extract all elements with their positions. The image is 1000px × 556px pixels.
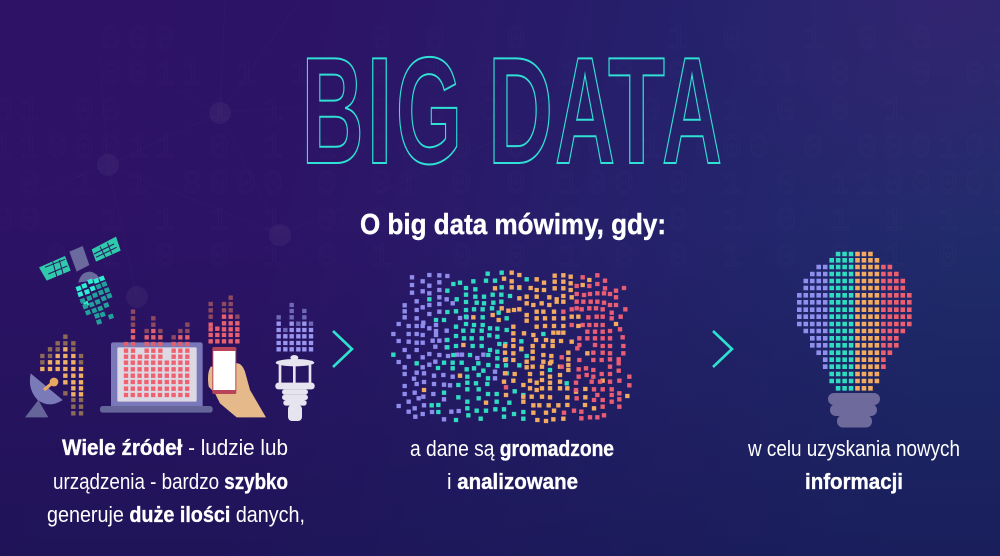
arrow 2: [713, 331, 732, 367]
icon: satellite dish with orange data bars: [25, 337, 81, 417]
icon: weather station with purple data bars: [275, 305, 315, 421]
text block: new information: [747, 436, 960, 494]
text block: sources: Wiele źródeł - ludzie lub: [62, 435, 288, 460]
icon: hand holding smartphone with data bars: [208, 298, 266, 417]
title: D: [488, 26, 553, 196]
icon: laptop with red data bars: [100, 312, 213, 413]
title: A: [555, 26, 615, 196]
arrow 1: [333, 331, 352, 367]
text block: sources: [47, 435, 305, 527]
title: [302, 26, 722, 196]
text block: collected and analysed: [410, 436, 614, 494]
text block: new information: w celu uzyskania nowych: [747, 436, 960, 461]
panel: scattered data points: [393, 273, 629, 421]
panel: data light bulb: [797, 254, 912, 428]
subheading: O big data mówimy, gdy:: [360, 209, 666, 241]
text block: sources: urządzenia - bardzo szybko: [53, 469, 288, 494]
bulb: screw base: [828, 393, 880, 428]
bulb: teal section: [829, 254, 853, 388]
title: G: [396, 26, 462, 196]
title: T: [608, 26, 665, 196]
text block: collected and analysed: a dane są gromadzone: [410, 436, 614, 461]
panel: data sources illustration: [25, 237, 315, 421]
bulb: purple section: [797, 267, 828, 367]
title: B: [302, 26, 364, 196]
text block: collected and analysed: i analizowane: [447, 469, 578, 494]
bulb: orange section: [855, 254, 879, 388]
text block: sources: generuje duże ilości danych,: [47, 502, 305, 527]
icon: satellite: [39, 237, 121, 323]
title: I: [366, 26, 392, 196]
title: A: [662, 26, 722, 196]
bulb: red section: [881, 267, 912, 367]
text block: new information: informacji: [805, 469, 903, 494]
